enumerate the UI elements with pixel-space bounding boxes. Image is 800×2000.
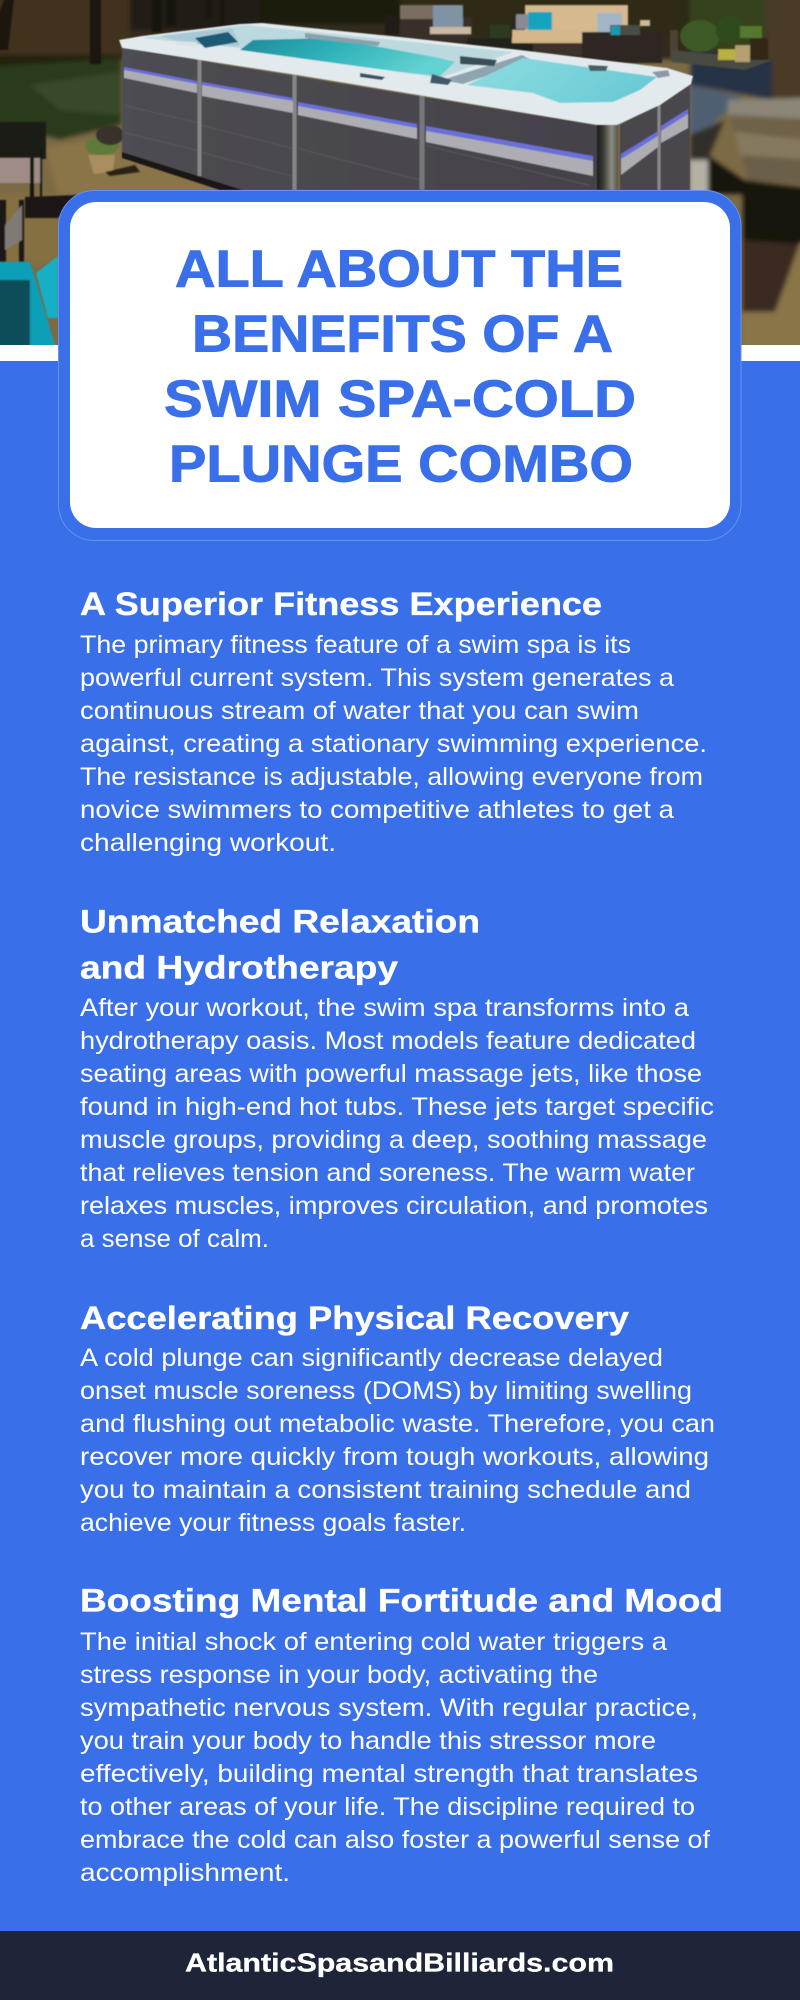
section: accelerating physical recovery: [80, 1300, 715, 1537]
section: a superior fitness experience: [80, 586, 707, 857]
body text: muscle groups, providing a deep, soothing massage: [80, 1126, 707, 1154]
body text: [80, 994, 714, 1253]
heading: Accelerating Physical Recovery: [80, 1300, 629, 1336]
spa acrylic rim and water: [119, 23, 693, 125]
body text: against, creating a stationary swimming experience.: [80, 730, 707, 758]
body text: found in high-end hot tubs. These jets target specific: [80, 1093, 714, 1121]
body text: [80, 1628, 710, 1887]
hero photo: swim spa on a patio: [0, 0, 800, 375]
heading: and Hydrotherapy: [80, 950, 398, 986]
body text: The resistance is adjustable, allowing everyone from: [80, 763, 703, 791]
body text: effectively, building mental strength that translates: [80, 1760, 698, 1788]
footer bar: [0, 1931, 800, 2000]
body text: achieve your fitness goals faster.: [80, 1509, 466, 1537]
heading: [80, 904, 480, 986]
footer website text: AtlanticSpasandBilliards.com: [185, 1948, 614, 1978]
body text: The initial shock of entering cold water triggers a: [80, 1628, 667, 1656]
title card: [58, 190, 741, 540]
body text: challenging workout.: [80, 829, 336, 857]
body text: you to maintain a consistent training schedule and: [80, 1476, 691, 1504]
body text: novice swimmers to competitive athletes to get a: [80, 796, 674, 824]
title text: ALL ABOUT THE: [175, 241, 623, 299]
body text: to other areas of your life. The discipline required to: [80, 1793, 695, 1821]
outdoor furniture and plants: [0, 5, 772, 355]
title text: BENEFITS OF A: [192, 306, 613, 364]
body text: The primary fitness feature of a swim spa is its: [80, 631, 631, 659]
body text: onset muscle soreness (DOMS) by limiting swelling: [80, 1377, 692, 1405]
title text: [164, 241, 636, 494]
body text: powerful current system. This system generates a: [80, 664, 674, 692]
body text: seating areas with powerful massage jets, like those: [80, 1060, 702, 1088]
body text: and flushing out metabolic waste. Therefore, you can: [80, 1410, 715, 1438]
body text: embrace the cold can also foster a powerful sense of: [80, 1826, 710, 1854]
body text: that relieves tension and soreness. The warm water: [80, 1159, 695, 1187]
body text: [80, 1344, 715, 1537]
heading: A Superior Fitness Experience: [80, 586, 602, 622]
section: boosting mental fortitude and mood: [80, 1582, 723, 1887]
body text: [80, 631, 707, 857]
body text: continuous stream of water that you can swim: [80, 697, 639, 725]
body text: stress response in your body, activating the: [80, 1661, 598, 1689]
tree trunks: [0, 0, 399, 64]
body text: you train your body to handle this stressor more: [80, 1727, 656, 1755]
section: unmatched relaxation and hydrotherapy: [80, 904, 714, 1253]
backdrop and garden: [0, 0, 800, 375]
title text: SWIM SPA-COLD: [164, 371, 636, 429]
body text: hydrotherapy oasis. Most models feature dedicated: [80, 1027, 696, 1055]
heading: Unmatched Relaxation: [80, 904, 480, 940]
body text: A cold plunge can significantly decrease delayed: [80, 1344, 663, 1372]
title text: PLUNGE COMBO: [169, 436, 633, 494]
body text: After your workout, the swim spa transforms into a: [80, 994, 689, 1022]
body text: relaxes muscles, improves circulation, and promotes: [80, 1192, 708, 1220]
body text: recover more quickly from tough workouts, allowing: [80, 1443, 709, 1471]
body text: a sense of calm.: [80, 1225, 269, 1253]
body text: sympathetic nervous system. With regular practice,: [80, 1694, 698, 1722]
swim spa front cabinet: [122, 48, 690, 190]
body text: accomplishment.: [80, 1859, 290, 1887]
heading: Boosting Mental Fortitude and Mood: [80, 1582, 723, 1618]
